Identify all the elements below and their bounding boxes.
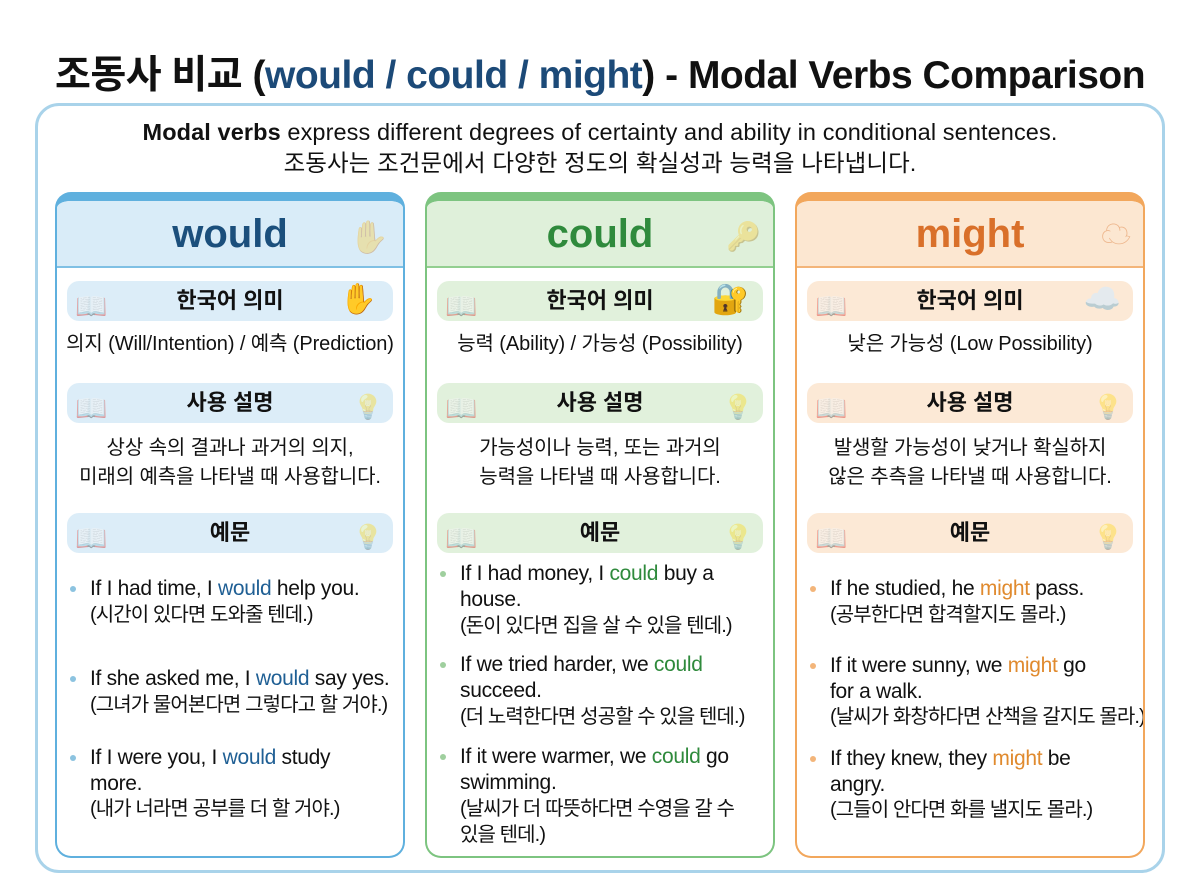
panel: would: If I were you, I would study: [90, 746, 330, 769]
description: 발생할 가능성이 낮거나 확실하지: [834, 437, 1106, 459]
section: 한국어 의미: 한국어 의미: [546, 288, 654, 313]
description: 상상 속의 결과나 과거의 의지,: [107, 437, 353, 459]
section: 한국어 의미: 한국어 의미: [916, 288, 1024, 313]
panel: could: 있을 텐데.): [460, 824, 545, 846]
examples: (공부한다면 합격할지도 몰라.): [830, 604, 1066, 626]
section: 한국어 의미: [807, 281, 1133, 321]
panel: would: [55, 192, 405, 858]
header: might: might: [916, 212, 1024, 256]
examples: If he studied, he might pass.: [830, 577, 1084, 600]
intro text: Modal verbs express different degrees of certainty and ability in conditional sentences.: [143, 119, 1057, 145]
section: 예문: 💡: [723, 524, 753, 551]
section: 사용 설명: 사용 설명: [186, 390, 274, 415]
panel: could: [425, 192, 775, 858]
panel: could: (날씨가 더 따뜻하다면 수영을 갈 수: [460, 798, 734, 820]
header: would: [57, 201, 403, 268]
section: 한국어 의미: 📖: [815, 291, 847, 321]
section: 사용 설명: [807, 383, 1133, 423]
section: 사용 설명: 📖: [75, 393, 107, 423]
meaning text: 의지 (Will/Intention) / 예측 (Prediction): [66, 333, 394, 355]
panel: would: more.: [90, 772, 142, 794]
panel: might: [795, 192, 1145, 858]
panel: might: If it were sunny, we might go: [830, 654, 1086, 677]
section: 사용 설명: 💡: [1093, 394, 1123, 421]
section: 사용 설명: 📖: [445, 393, 477, 423]
section: 한국어 의미: ☁️: [1084, 283, 1121, 316]
section: 사용 설명: 💡: [723, 394, 753, 421]
panel: would: (그녀가 물어본다면 그렇다고 할 거야.): [90, 694, 387, 716]
description: [828, 437, 1112, 488]
section: 한국어 의미: 📖: [75, 291, 107, 321]
section: 사용 설명: [67, 383, 393, 423]
section: 한국어 의미: 📖: [445, 291, 477, 321]
panel: could: (더 노력한다면 성공할 수 있을 텐데.): [460, 706, 744, 728]
header: might: ☁: [1101, 219, 1131, 252]
section: 예문: 📖: [815, 523, 847, 553]
header: might: [797, 201, 1143, 268]
section: 한국어 의미: [67, 281, 393, 321]
section: 예문: 💡: [353, 524, 383, 551]
section: 예문: 💡: [1093, 524, 1123, 551]
section: 사용 설명: 💡: [353, 394, 383, 421]
header: would: ✋: [349, 219, 389, 255]
header: could: [427, 201, 773, 268]
examples: If I had money, I could buy a: [460, 562, 714, 585]
panel: could: If we tried harder, we could: [460, 653, 703, 676]
section: 예문: 예문: [580, 520, 620, 545]
examples: [90, 576, 405, 628]
examples: [460, 561, 775, 639]
section: 한국어 의미: 🔐: [712, 283, 749, 316]
description: 미래의 예측을 나타낼 때 사용합니다.: [79, 466, 381, 488]
description: [479, 437, 721, 488]
section: 한국어 의미: [437, 281, 763, 321]
section: 사용 설명: 사용 설명: [926, 390, 1014, 415]
intro text: [143, 119, 1057, 176]
section: 예문: 📖: [445, 523, 477, 553]
panel: could: succeed.: [460, 679, 542, 702]
panel: would: If she asked me, I would say yes.: [90, 667, 389, 690]
section: 예문: 예문: [950, 520, 990, 545]
panel: might: (그들이 안다면 화를 낼지도 몰라.): [830, 799, 1092, 821]
panel: would: (내가 너라면 공부를 더 할 거야.): [90, 798, 339, 820]
panel: might: If they knew, they might be: [830, 747, 1071, 770]
panel: might: for a walk.: [830, 680, 922, 702]
panel: could: swimming.: [460, 771, 556, 794]
section: 사용 설명: [437, 383, 763, 423]
examples: If I had time, I would help you.: [90, 577, 359, 600]
section: 사용 설명: 사용 설명: [556, 390, 644, 415]
section: 예문: [807, 513, 1133, 553]
intro text: 조동사는 조건문에서 다양한 정도의 확실성과 능력을 나타냅니다.: [284, 150, 916, 176]
meaning text: 능력 (Ability) / 가능성 (Possibility): [457, 333, 743, 355]
section: 예문: 예문: [210, 520, 250, 545]
section: 사용 설명: 📖: [815, 393, 847, 423]
examples: (시간이 있다면 도와줄 텐데.): [90, 604, 313, 626]
header: could: 🔑: [726, 221, 761, 252]
description: 가능성이나 능력, 또는 과거의: [479, 437, 721, 459]
description: [79, 437, 381, 488]
title: 조동사 비교 (would / could / might) - Modal Verbs Comparison: [55, 54, 1145, 97]
section: 예문: 📖: [75, 523, 107, 553]
examples: house.: [460, 588, 521, 611]
meaning text: 낮은 가능성 (Low Possibility): [847, 333, 1093, 355]
section: 예문: [67, 513, 393, 553]
section: 한국어 의미: ✋: [340, 283, 377, 316]
panel: could: If it were warmer, we could go: [460, 745, 729, 768]
description: 능력을 나타낼 때 사용합니다.: [479, 466, 721, 488]
section: 한국어 의미: 한국어 의미: [176, 288, 284, 313]
examples: (돈이 있다면 집을 살 수 있을 텐데.): [460, 615, 732, 637]
panel: might: (날씨가 화창하다면 산책을 갈지도 몰라.): [830, 706, 1145, 728]
section: 예문: [437, 513, 763, 553]
examples: [830, 576, 1145, 628]
description: 않은 추측을 나타낼 때 사용합니다.: [828, 466, 1112, 488]
panel: might: angry.: [830, 772, 885, 796]
header: could: could: [547, 212, 653, 256]
header: would: would: [172, 212, 288, 256]
